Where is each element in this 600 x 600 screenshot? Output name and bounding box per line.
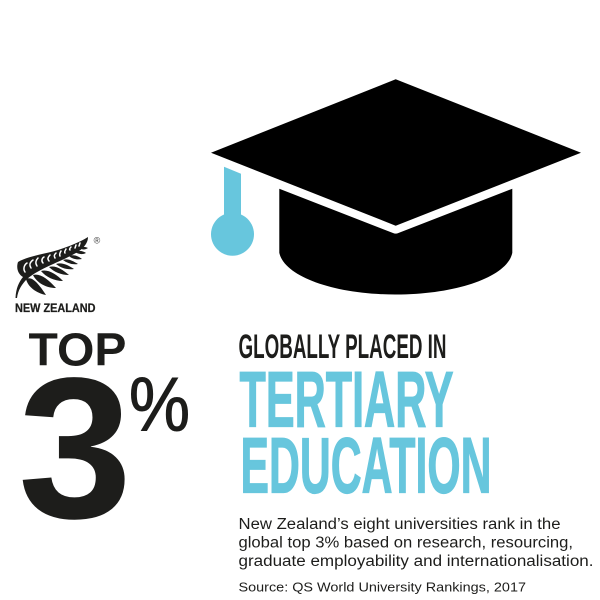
body text xyxy=(238,516,594,570)
number 3: 3 xyxy=(18,336,132,561)
cap band xyxy=(279,189,512,294)
fern upper frond xyxy=(16,237,88,298)
logo: New Zealand fern xyxy=(15,236,101,315)
statistic: top 3% xyxy=(18,324,190,561)
percent sign: % xyxy=(129,362,190,448)
registered mark: ® xyxy=(94,236,101,246)
cap tassel xyxy=(211,167,254,256)
heading: globally placed in tertiary education xyxy=(238,328,492,510)
cap top board xyxy=(211,79,581,226)
body text: global top 3% based on research, resourcing, xyxy=(238,534,573,552)
body text: graduate employability and internationalisation. xyxy=(238,553,594,570)
icon: graduation cap xyxy=(211,79,581,294)
fern slots xyxy=(24,243,80,272)
top label: TOP xyxy=(28,324,126,376)
logo wordmark: NEW ZEALAND xyxy=(15,303,96,315)
body text: New Zealand’s eight universities rank in the xyxy=(238,516,560,533)
source note: Source: QS World University Rankings, 2017 xyxy=(238,580,526,594)
fern lower leaflets xyxy=(26,247,88,295)
